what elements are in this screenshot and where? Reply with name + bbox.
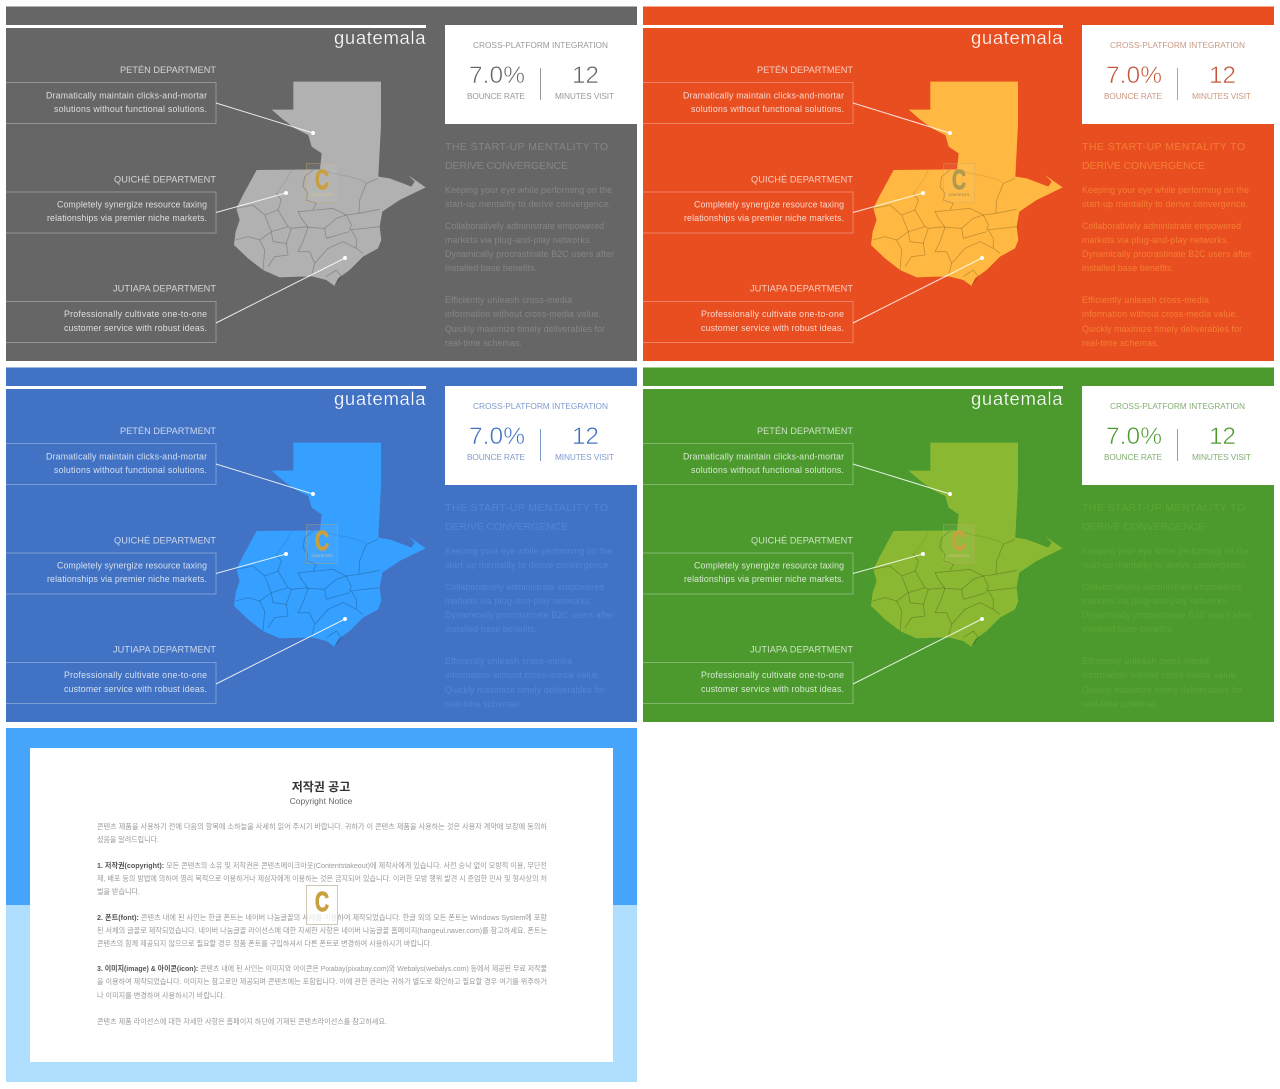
callout: Peten: Dramatically maintain clicks-and-mortar bbox=[46, 452, 207, 462]
callout: Quiche bbox=[6, 536, 288, 594]
callout: Quiche: relationships via premier niche markets. bbox=[684, 574, 844, 584]
callout: Jutiapa: Professionally cultivate one-to-one bbox=[64, 309, 207, 319]
stats card: 12 bbox=[1209, 423, 1236, 450]
callout: Peten: Dramatically maintain clicks-and-mortar bbox=[683, 90, 844, 100]
stats card: BOUNCE RATE bbox=[1104, 452, 1162, 462]
title: guatemala bbox=[971, 388, 1063, 409]
callout: Peten: solutions without functional solutions. bbox=[691, 104, 844, 114]
text block: start-up mentality to derive convergence. bbox=[1082, 199, 1248, 209]
callout: Quiche: relationships via premier niche markets. bbox=[47, 213, 207, 223]
text block: DERIVE CONVERGENCE bbox=[1082, 521, 1205, 533]
callout: Quiche: relationships via premier niche markets. bbox=[47, 574, 207, 584]
text block: Keeping your eye while performing on the bbox=[1082, 546, 1249, 556]
watermark logo bbox=[306, 164, 338, 202]
stats card: BOUNCE RATE bbox=[467, 91, 525, 101]
text block bbox=[1082, 502, 1251, 709]
text block: Dynamically procrastinate B2C users after bbox=[1082, 249, 1251, 259]
panel: copyright notice bbox=[6, 728, 637, 1082]
text block: Efficiently unleash cross-media bbox=[445, 656, 572, 666]
text block: Dynamically procrastinate B2C users after bbox=[1082, 610, 1251, 620]
text block: Collaboratively administrate empowered bbox=[445, 582, 604, 592]
watermark logo: CONTENTS bbox=[312, 554, 333, 558]
text block: information without cross-media value. bbox=[1082, 309, 1238, 319]
panel: gray guatemala bbox=[6, 6, 643, 361]
text block: DERIVE CONVERGENCE bbox=[445, 521, 568, 533]
callout: Jutiapa: JUTIAPA DEPARTMENT bbox=[750, 644, 853, 654]
text block: Keeping your eye while performing on the bbox=[445, 546, 612, 556]
watermark logo: CONTENTS bbox=[949, 554, 970, 558]
text block bbox=[1082, 141, 1251, 348]
map bbox=[234, 82, 426, 286]
callout: Peten: Dramatically maintain clicks-and-mortar bbox=[46, 90, 207, 100]
callout: Jutiapa: customer service with robust ideas. bbox=[701, 684, 844, 694]
text block: real-time schemas. bbox=[445, 338, 522, 348]
stats card: MINUTES VISIT bbox=[555, 452, 614, 462]
text block: Quickly maximize timely deliverables for bbox=[1082, 324, 1242, 334]
text block: start-up mentality to derive convergence. bbox=[445, 199, 611, 209]
stats card: MINUTES VISIT bbox=[1192, 91, 1251, 101]
text block: Quickly maximize timely deliverables for bbox=[445, 324, 605, 334]
notice text: 나 이미지를 변경하여 사용하시기 바랍니다. bbox=[97, 990, 225, 1000]
text block: Dynamically procrastinate B2C users after bbox=[445, 249, 614, 259]
stats card: BOUNCE RATE bbox=[1104, 91, 1162, 101]
callout: Peten: solutions without functional solutions. bbox=[54, 465, 207, 475]
text block: information without cross-media value. bbox=[1082, 670, 1238, 680]
heading: 저작권 공고 bbox=[292, 779, 350, 794]
text block: real-time schemas. bbox=[445, 699, 522, 709]
text block: installed base benefits. bbox=[1082, 624, 1174, 634]
stats card bbox=[445, 386, 643, 485]
stats card: MINUTES VISIT bbox=[1192, 452, 1251, 462]
callout: Jutiapa: customer service with robust ideas. bbox=[64, 684, 207, 694]
watermark logo bbox=[306, 524, 338, 564]
notice text: 콘텐츠 제품을 사용하기 전에 다음의 항목에 소하늘을 사세히 읽어 주시기 바랍니다. 귀하가 이 콘텐츠 제품을 사용하는 것은 사용자 계약에 보장에 동의하 bbox=[97, 821, 547, 831]
watermark logo: C bbox=[315, 886, 329, 917]
stats card bbox=[445, 25, 643, 124]
watermark logo bbox=[944, 524, 974, 564]
callout: Peten: PETÉN DEPARTMENT bbox=[757, 426, 853, 436]
watermark logo: C bbox=[315, 525, 329, 556]
watermark logo: C bbox=[952, 164, 966, 195]
stats card: BOUNCE RATE bbox=[467, 452, 525, 462]
text block: markets via plug-and-play networks. bbox=[1082, 596, 1229, 606]
text block: THE START-UP MENTALITY TO bbox=[1082, 141, 1245, 153]
panel: orange guatemala bbox=[642, 6, 1280, 361]
notice text: 셨음을 알려드립니다. bbox=[97, 834, 159, 844]
notice text: 1. 저작권(copyright): 모든 콘텐츠의 소유 및 저작권은 콘텐츠메이크아웃(Contentstakeout)에 제작사에게 있습니다. 사전 승낙 없이 모방적 이용, 무단전 bbox=[97, 860, 547, 870]
callout: Jutiapa: customer service with robust ideas. bbox=[701, 323, 844, 333]
notice text bbox=[97, 821, 547, 1026]
callout: Peten: PETÉN DEPARTMENT bbox=[120, 426, 216, 436]
stats card: 12 bbox=[1209, 62, 1236, 89]
text block: Collaboratively administrate empowered bbox=[1082, 582, 1241, 592]
text block bbox=[445, 502, 614, 709]
callout: Quiche bbox=[642, 174, 925, 233]
notice text: 콘텐츠 제품 라이선스에 대한 자세한 사항은 홈페이지 하단에 기재된 콘텐츠라이선스를 참고하세요. bbox=[97, 1016, 387, 1026]
stats card: 12 bbox=[572, 62, 599, 89]
text block: information without cross-media value. bbox=[445, 309, 601, 319]
text block: Keeping your eye while performing on the bbox=[1082, 185, 1249, 195]
title: guatemala bbox=[334, 27, 426, 48]
text block: installed base benefits. bbox=[445, 624, 537, 634]
callout: Quiche: QUICHÉ DEPARTMENT bbox=[751, 536, 853, 546]
notice text: 콘텐츠의 함께 제공되지 않으므로 필요할 경우 정품 폰트를 구입하셔서 다른 폰트로 변경하여 사용하시기 바랍니다. bbox=[97, 938, 432, 948]
text block: installed base benefits. bbox=[1082, 263, 1174, 273]
callout: Peten bbox=[642, 426, 952, 496]
callout: Jutiapa: JUTIAPA DEPARTMENT bbox=[750, 284, 853, 294]
callout: Quiche: Completely synergize resource taxing bbox=[694, 200, 844, 210]
callout: Quiche: relationships via premier niche markets. bbox=[684, 213, 844, 223]
callout: Quiche: QUICHÉ DEPARTMENT bbox=[114, 174, 216, 184]
watermark logo bbox=[944, 164, 974, 202]
callout: Quiche: Completely synergize resource taxing bbox=[57, 200, 207, 210]
text block: THE START-UP MENTALITY TO bbox=[445, 141, 608, 153]
panel: blue guatemala bbox=[6, 368, 643, 722]
notice text: 2. 폰트(font): 콘텐츠 내에 된 사인는 한글 폰트는 네이버 나눔글꼴의 서체를 이용하여 제작되었습니다. 한글 외의 모든 폰트는 Windows System에 포함 bbox=[97, 912, 547, 922]
callout: Peten bbox=[6, 65, 315, 135]
callout: Jutiapa: Professionally cultivate one-to-one bbox=[64, 670, 207, 680]
text block: Collaboratively administrate empowered bbox=[445, 221, 604, 231]
notice text: 된 서체의 글꼴로 제작되었습니다. 네이버 나눔글꼴 라이선스에 대한 자세한 사항은 네이버 나눔글꼴 홈페이지(hangeul.naver.com)를 참고하세요. 폰트는 bbox=[97, 925, 547, 935]
stats card bbox=[1082, 386, 1274, 485]
stats card: 7.0% bbox=[1106, 62, 1162, 89]
stats card: CROSS-PLATFORM INTEGRATION bbox=[473, 401, 608, 411]
notice text: 을 이용하여 제작되었습니다. 이미지는 참고로만 제공되며 콘텐츠에는 포함됩니다. 이에 관한 권리는 귀하가 별도로 확인하고 필요할 경우 여기를 위주하거 bbox=[97, 976, 547, 986]
callout: Peten: Dramatically maintain clicks-and-mortar bbox=[683, 452, 844, 462]
callout: Peten: solutions without functional solutions. bbox=[691, 465, 844, 475]
text block: information without cross-media value. bbox=[445, 670, 601, 680]
stats card: 7.0% bbox=[469, 62, 525, 89]
text block: THE START-UP MENTALITY TO bbox=[445, 502, 608, 514]
callout: Jutiapa: JUTIAPA DEPARTMENT bbox=[113, 644, 216, 654]
callout: Peten bbox=[6, 426, 315, 496]
stats card: 7.0% bbox=[469, 423, 525, 450]
text block bbox=[445, 141, 614, 348]
callout: Jutiapa: Professionally cultivate one-to-one bbox=[701, 309, 844, 319]
watermark logo bbox=[306, 886, 338, 924]
title: guatemala bbox=[334, 388, 426, 409]
title: guatemala bbox=[971, 27, 1063, 48]
text block: real-time schemas. bbox=[1082, 699, 1159, 709]
map bbox=[871, 82, 1063, 286]
callout: Quiche: QUICHÉ DEPARTMENT bbox=[751, 174, 853, 184]
text block: real-time schemas. bbox=[1082, 338, 1159, 348]
stats card: MINUTES VISIT bbox=[555, 91, 614, 101]
callout: Jutiapa: customer service with robust ideas. bbox=[64, 323, 207, 333]
callout: Jutiapa: JUTIAPA DEPARTMENT bbox=[113, 284, 216, 294]
notice text: 3. 이미지(image) & 아이콘(icon): 콘텐츠 내에 된 사인는 이미지와 아이콘은 Pixabay(pixabay.com)와 Webalys(webalys.com) 등에서 제공된 무료 저작물 bbox=[97, 963, 547, 973]
map bbox=[871, 443, 1063, 647]
stats card: 12 bbox=[572, 423, 599, 450]
text block: DERIVE CONVERGENCE bbox=[1082, 160, 1205, 172]
callout: Quiche bbox=[642, 536, 925, 594]
notice text: 벌을 받습니다. bbox=[97, 886, 140, 896]
callout: Jutiapa: Professionally cultivate one-to-one bbox=[701, 670, 844, 680]
text block: Efficiently unleash cross-media bbox=[1082, 656, 1209, 666]
text block: THE START-UP MENTALITY TO bbox=[1082, 502, 1245, 514]
callout: Jutiapa bbox=[642, 256, 984, 342]
callout: Jutiapa bbox=[6, 256, 347, 342]
callout: Jutiapa bbox=[642, 617, 984, 704]
text block: Collaboratively administrate empowered bbox=[1082, 221, 1241, 231]
text block: markets via plug-and-play networks. bbox=[1082, 235, 1229, 245]
notice text: 재, 배포 등의 방법에 의하여 영리 목적으로 이용하거나 제삼자에게 이용하는 것은 금지되어 있습니다. 이러한 모방 행위 발견 시 준엄한 민사 및 형사상의 처 bbox=[97, 873, 547, 883]
text block: Keeping your eye while performing on the bbox=[445, 185, 612, 195]
callout: Quiche: Completely synergize resource taxing bbox=[57, 560, 207, 570]
text block: Efficiently unleash cross-media bbox=[1082, 295, 1209, 305]
stats card: 7.0% bbox=[1106, 423, 1162, 450]
text block: installed base benefits. bbox=[445, 263, 537, 273]
callout: Jutiapa bbox=[6, 617, 347, 704]
text block: markets via plug-and-play networks. bbox=[445, 235, 592, 245]
panel: green guatemala bbox=[642, 368, 1274, 722]
stats card: CROSS-PLATFORM INTEGRATION bbox=[1110, 40, 1245, 50]
text block: start-up mentality to derive convergence. bbox=[1082, 560, 1248, 570]
watermark logo: CONTENTS bbox=[949, 193, 970, 197]
callout: Quiche: Completely synergize resource taxing bbox=[694, 560, 844, 570]
watermark logo: C bbox=[315, 164, 329, 195]
callout: Peten: PETÉN DEPARTMENT bbox=[120, 65, 216, 75]
callout: Quiche bbox=[6, 174, 288, 233]
text block: Dynamically procrastinate B2C users after bbox=[445, 610, 614, 620]
text block: start-up mentality to derive convergence. bbox=[445, 560, 611, 570]
text block: Efficiently unleash cross-media bbox=[445, 295, 572, 305]
stats card bbox=[1082, 25, 1280, 124]
callout: Quiche: QUICHÉ DEPARTMENT bbox=[114, 536, 216, 546]
text block: markets via plug-and-play networks. bbox=[445, 596, 592, 606]
watermark logo: CONTENTS bbox=[312, 193, 333, 197]
stats card: CROSS-PLATFORM INTEGRATION bbox=[473, 40, 608, 50]
callout: Peten bbox=[642, 65, 952, 135]
subheading: Copyright Notice bbox=[290, 796, 353, 806]
text block: Quickly maximize timely deliverables for bbox=[445, 685, 605, 695]
watermark logo: C bbox=[952, 525, 966, 556]
callout: Peten: solutions without functional solutions. bbox=[54, 104, 207, 114]
callout: Peten: PETÉN DEPARTMENT bbox=[757, 65, 853, 75]
text block: DERIVE CONVERGENCE bbox=[445, 160, 568, 172]
text block: Quickly maximize timely deliverables for bbox=[1082, 685, 1242, 695]
map bbox=[234, 443, 426, 647]
stats card: CROSS-PLATFORM INTEGRATION bbox=[1110, 401, 1245, 411]
